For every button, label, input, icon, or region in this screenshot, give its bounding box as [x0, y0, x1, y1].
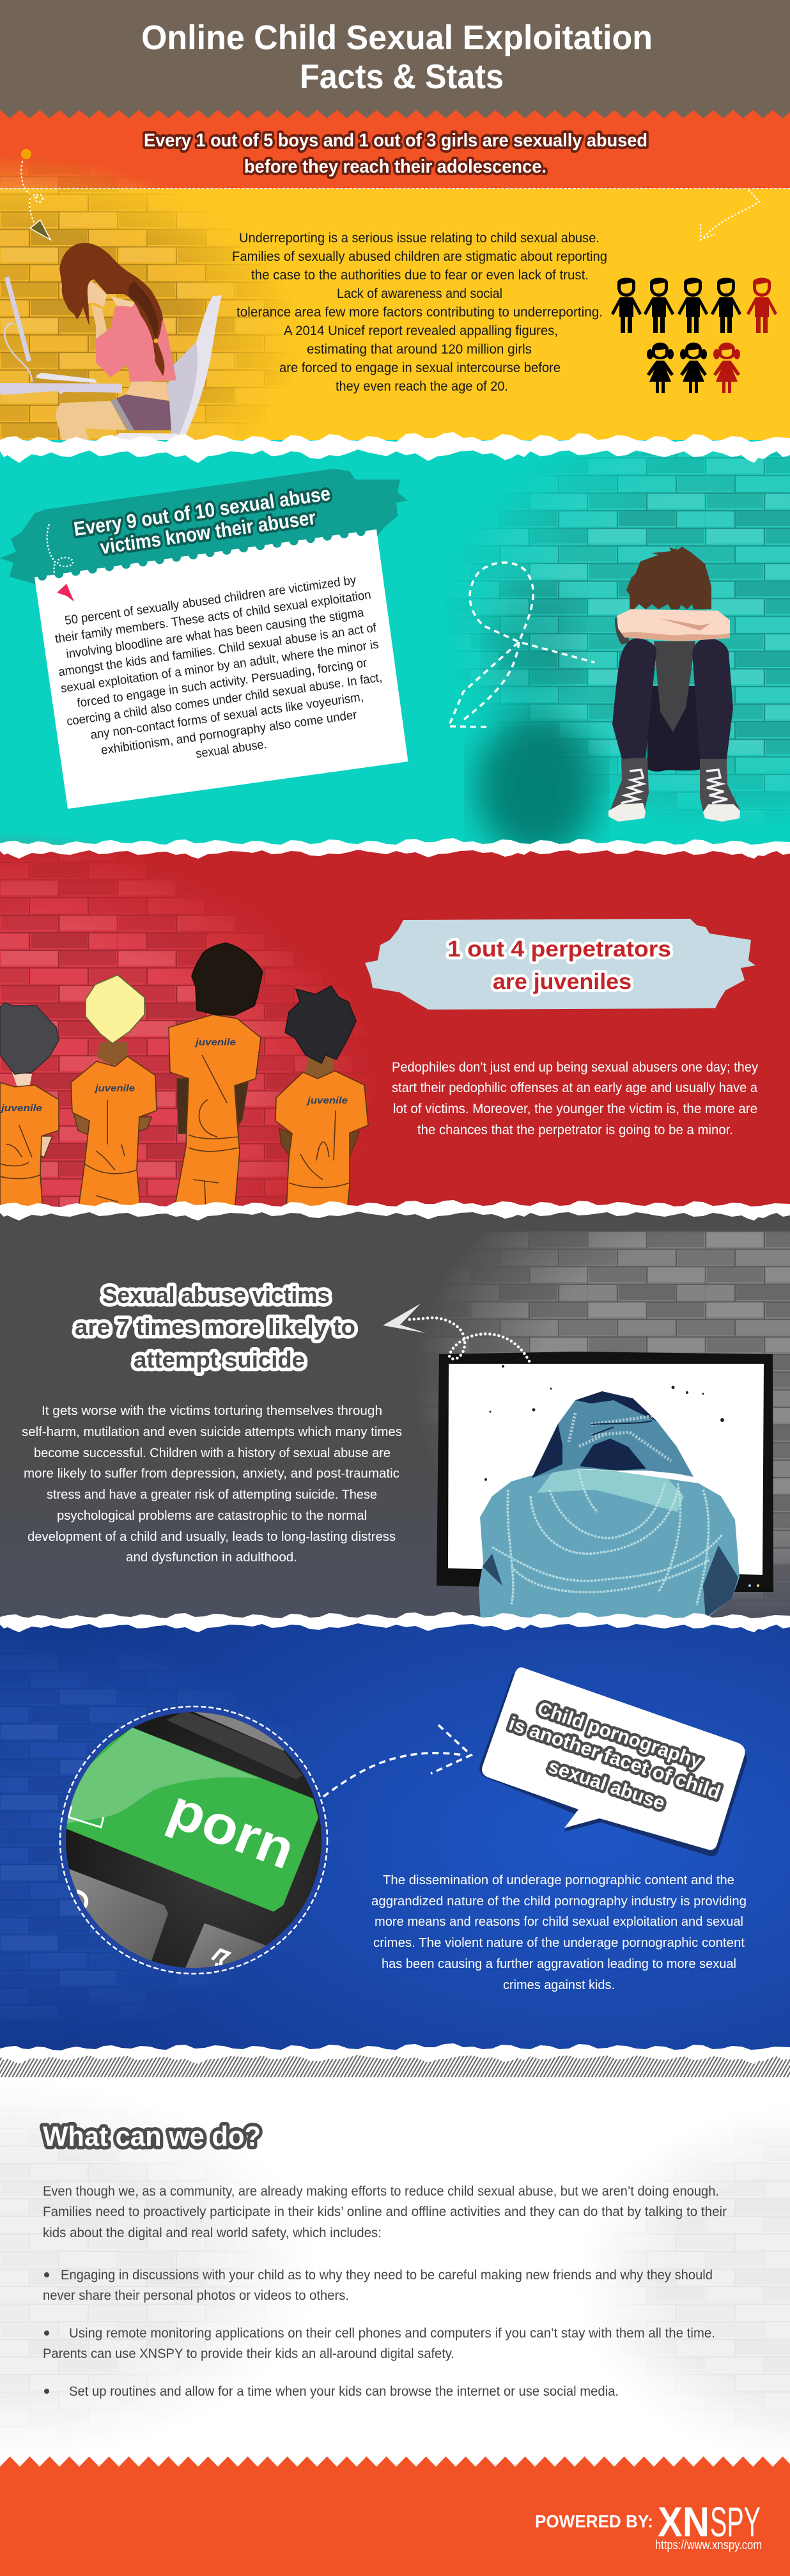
text block: sexual abuse.: [195, 737, 268, 761]
headline statistic: [144, 130, 647, 177]
torn paper divider: blue to hatch: [0, 2043, 790, 2064]
branding: [535, 2498, 762, 2552]
heading: are 7 times more likely to: [75, 1314, 355, 1340]
text block: underreporting: Lack of awareness and social: [337, 286, 502, 301]
text block: The dissemination of underage pornographic content and the: [383, 1873, 734, 1887]
figure: juvenile three: juvenile: [194, 1037, 236, 1048]
icon: dotted arrow to heading: [383, 1304, 529, 1361]
title: [141, 19, 653, 96]
icon: dashed awareness ribbon: [449, 563, 594, 727]
heading: are juveniles: [493, 969, 631, 994]
text block: development of a child and usually, leads to long-lasting distress: [27, 1530, 396, 1544]
figure: juvenile three: [169, 943, 263, 1212]
bullet list: Engaging in discussions with your child as to why they need to be careful making new friends and why they should: [61, 2268, 713, 2283]
text block: underreporting: the case to the authorities due to fear or even lack of trust.: [251, 268, 589, 283]
branding: https://www.xnspy.com: [655, 2538, 762, 2552]
speech bubble: [479, 1667, 747, 1856]
text block: underreporting: they even reach the age of 20.: [336, 379, 508, 394]
bullet list: Using remote monitoring applications on their cell phones and computers if you can’t stay with them all the time.: [69, 2326, 715, 2341]
panel: what can we do: [0, 2052, 790, 2462]
figure: juvenile four: juvenile: [306, 1095, 348, 1106]
torn paper divider: teal to red: [0, 838, 790, 859]
text block: become successful. Children with a history of sexual abuse are: [34, 1446, 391, 1460]
heading: [72, 482, 335, 562]
text block: psychological problems are catastrophic to the normal: [57, 1509, 367, 1523]
text block: involving bloodline are what has been causing the stigma: [65, 605, 365, 661]
illustration: keyboard key in circle: [59, 1706, 328, 1976]
icon: dotted arrow left: [21, 149, 50, 240]
heading: Sexual abuse victims: [102, 1282, 330, 1308]
text block: the chances that the perpetrator is going to be a minor.: [417, 1123, 733, 1137]
panel: key statistic band: [0, 110, 790, 189]
text block: underreporting: A 2014 Unicef report revealed appalling figures,: [284, 324, 558, 338]
illustration: four juveniles from behind: [0, 943, 368, 1212]
text block: any non-contact forms of sexual acts like voyeurism,: [89, 690, 364, 742]
headline statistic: Every 1 out of 5 boys and 1 out of 3 girls are sexually abused: [144, 130, 647, 151]
text block: stress and have a greater risk of attempting suicide. These: [47, 1488, 377, 1502]
branding: XN: [658, 2498, 709, 2545]
panel: footer: [0, 2456, 790, 2576]
heading: attempt suicide: [134, 1347, 305, 1373]
figure: juvenile one: [0, 1003, 59, 1212]
text block: forced to engage in such activity. Persuading, forcing or: [76, 655, 368, 710]
panel: juvenile perpetrators: [0, 835, 790, 1207]
brush banner: [0, 469, 408, 585]
text block: underreporting: [232, 231, 607, 394]
panel: suicide risk: [0, 1212, 790, 1619]
headline statistic: before they reach their adolescence.: [244, 157, 546, 177]
text block: lot of victims. Moreover, the younger the victim is, the more are: [393, 1102, 757, 1116]
text block: [43, 2184, 727, 2240]
icon: five boys pictogram: [611, 277, 777, 333]
callout text: Child pornography: [535, 1698, 705, 1773]
icon: red arrow: [57, 584, 74, 602]
text block: coercing a child also comes under child sexual abuse. In fact,: [66, 671, 383, 729]
brush label: [365, 919, 755, 1010]
paper card: [35, 482, 408, 809]
torn paper divider: red to grey: [0, 1200, 790, 1221]
text block: Pedophiles don’t just end up being sexual abusers one day; they: [392, 1060, 758, 1075]
bullet list: Set up routines and allow for a time when your kids can browse the internet or use social media.: [69, 2384, 619, 2399]
bullet list: never share their personal photos or videos to others.: [43, 2288, 349, 2303]
text block: underreporting: are forced to engage in sexual intercourse before: [279, 361, 561, 375]
heading: victims know their abuser: [98, 506, 317, 559]
text block: self-harm, mutilation and even suicide attempts which many times: [22, 1425, 402, 1439]
icon: dashed arrow: [323, 1725, 471, 1797]
title: Facts & Stats: [300, 58, 504, 96]
panel: underreporting: [0, 149, 790, 440]
text block: aggrandized nature of the child pornography industry is providing: [371, 1894, 747, 1909]
text block: kids about the digital and real world safety, which includes:: [43, 2226, 382, 2240]
text block: underreporting: tolerance area few more factors contributing to underreporting.: [236, 305, 603, 320]
text block: has been causing a further aggravation leading to more sexual: [382, 1957, 736, 1971]
text block: underreporting: Underreporting is a serious issue relating to child sexual abuse.: [239, 231, 600, 246]
text block: underreporting: Families of sexually abused children are stigmatic about reporting: [232, 249, 607, 264]
text block: amongst the kids and families. Child sexual abuse is an act of: [58, 621, 378, 679]
title: Online Child Sexual Exploitation: [141, 19, 653, 57]
bullet list: Parents can use XNSPY to provide their kids an all-around digital safety.: [43, 2346, 454, 2361]
text block: underreporting: estimating that around 120 million girls: [307, 342, 532, 357]
figure: juvenile two: juvenile: [94, 1083, 135, 1094]
bullet list: [43, 2268, 715, 2399]
torn paper divider: yellow to teal: [0, 432, 790, 463]
heading: [75, 1282, 355, 1373]
illustration: keyboard key in circle: porn: [160, 1778, 303, 1881]
heading: Every 9 out of 10 sexual abuse: [72, 482, 332, 540]
text block: start their pedophilic offenses at an early age and usually have a: [392, 1081, 757, 1095]
text block: more likely to suffer from depression, anxiety, and post-traumatic: [24, 1467, 399, 1481]
panel: victims know their abuser: [0, 409, 790, 857]
figure: juvenile four: [275, 986, 368, 1212]
text block: 50 percent of sexually abused children are victimized by: [64, 573, 357, 628]
text block: Even though we, as a community, are already making efforts to reduce child sexual abuse, but we aren’t doing enough.: [43, 2184, 719, 2199]
illustration: girl at computer: [0, 243, 222, 441]
torn paper divider: grey to blue: [0, 1612, 790, 1632]
heading: [447, 937, 671, 994]
text block: [50, 571, 391, 778]
illustration: boy hugging knees: [608, 547, 740, 822]
figure: juvenile two: [71, 975, 157, 1212]
text block: exhibitionism, and pornography also come under: [100, 708, 358, 758]
icon: three girls pictogram: [647, 343, 740, 393]
text block: [22, 1404, 402, 1565]
branding: POWERED BY:: [535, 2511, 653, 2531]
text block: [392, 1060, 758, 1137]
text block: crimes. The violent nature of the underage pornographic content: [373, 1936, 745, 1950]
callout text: sexual abuse: [546, 1756, 667, 1815]
illustration: person facing monitor: [437, 1352, 773, 1621]
text block: It gets worse with the victims torturing themselves through: [42, 1404, 382, 1418]
text block: [371, 1873, 747, 1992]
text block: crimes against kids.: [503, 1978, 615, 1992]
text block: Families need to proactively participate in their kids’ online and offline activities and they can do that by talking to their: [43, 2205, 727, 2219]
panel: child pornography: [0, 1620, 790, 2061]
heading: What can we do?: [43, 2121, 261, 2152]
callout text: is another facet of child: [506, 1713, 723, 1804]
text block: sexual exploitation of a minor by an adult, where the minor is: [60, 637, 380, 696]
icon: dotted arrow right: [701, 190, 759, 240]
panel: title band: [0, 0, 790, 111]
text block: and dysfunction in adulthood.: [126, 1550, 297, 1565]
heading: 1 out 4 perpetrators: [447, 937, 671, 962]
figure: juvenile one: juvenile: [0, 1103, 42, 1114]
text block: more means and reasons for child sexual exploitation and sexual: [375, 1915, 743, 1929]
icon: dotted arrow to paper: [47, 524, 73, 574]
text block: their family members. These acts of child sexual exploitation: [54, 588, 372, 646]
